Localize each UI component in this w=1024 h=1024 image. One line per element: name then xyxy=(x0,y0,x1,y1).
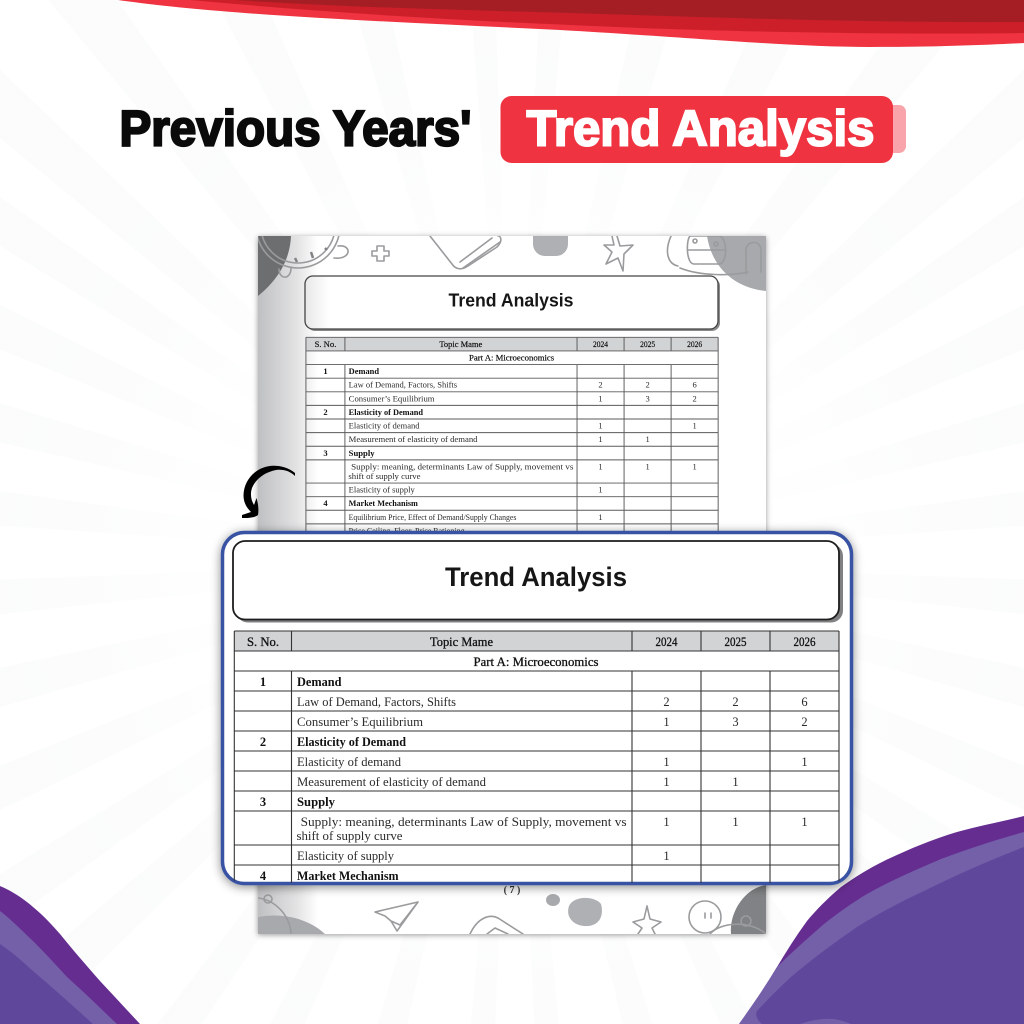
small trend analysis table: Demand xyxy=(349,366,379,376)
zoomed trend analysis table: 6 xyxy=(801,695,808,709)
zoomed heading card: Trend Analysis xyxy=(445,562,627,592)
small trend analysis table: 3 xyxy=(645,393,650,403)
zoomed heading card xyxy=(233,541,843,622)
zoomed trend analysis table: Supply: meaning, determinants Law of Supply, movement vs xyxy=(301,815,627,829)
zoomed trend analysis table: 1 xyxy=(801,755,808,769)
zoomed trend analysis table: 1 xyxy=(801,815,808,829)
small trend analysis table: 6 xyxy=(693,380,697,390)
title badge: Trend Analysis: Trend Analysis xyxy=(526,100,874,156)
zoomed trend analysis table: Consumer’s Equilibrium xyxy=(297,715,423,729)
zoomed trend analysis table: Elasticity of Demand xyxy=(297,735,406,749)
zoomed trend analysis table: 2 xyxy=(260,735,266,749)
zoomed trend analysis table: 2 xyxy=(801,715,808,729)
small heading card xyxy=(305,276,720,331)
small heading card: Trend Analysis xyxy=(448,290,574,310)
zoomed trend analysis table: 1 xyxy=(663,775,670,789)
small trend analysis table: 1 xyxy=(323,366,328,376)
small trend analysis table: Equilibrium Price, Effect of Demand/Supply Changes xyxy=(349,512,516,522)
small trend analysis table: 2 xyxy=(693,393,697,403)
small trend analysis table: 2 xyxy=(598,380,603,390)
small trend analysis table: 2 xyxy=(323,407,328,417)
small trend analysis table: Elasticity of supply xyxy=(349,485,416,495)
zoomed trend analysis table: 2025 xyxy=(724,635,746,649)
curved arrow pointing down to zoom panel xyxy=(242,466,295,518)
zoomed trend analysis table: 4 xyxy=(260,869,267,883)
small trend analysis table: Price Ceiling, Floor, Price Rationing xyxy=(349,525,465,535)
background book page xyxy=(256,184,766,934)
small trend analysis table: 2024 xyxy=(593,339,609,349)
bottom page doodles xyxy=(258,885,766,934)
small trend analysis table: Consumer’s Equilibrium xyxy=(349,393,435,403)
small trend analysis table xyxy=(306,337,718,538)
zoomed panel with blue frame xyxy=(222,532,852,885)
small trend analysis table: Market Mechanism xyxy=(349,498,418,508)
zoomed trend analysis table: 2 xyxy=(732,695,739,709)
title: Previous Years': Previous Years' xyxy=(120,100,472,156)
zoomed trend analysis table: Law of Demand, Factors, Shifts xyxy=(297,695,456,709)
small trend analysis table: Measurement of elasticity of demand xyxy=(349,434,478,444)
zoomed trend analysis table: 1 xyxy=(663,715,670,729)
zoomed trend analysis table: 1 xyxy=(663,755,670,769)
zoomed trend analysis table: Elasticity of demand xyxy=(297,755,402,769)
zoomed trend analysis table: 1 xyxy=(663,815,670,829)
top page doodles xyxy=(258,236,766,296)
zoomed trend analysis table: 2 xyxy=(663,695,670,709)
small trend analysis table: 1 xyxy=(598,461,603,471)
small trend analysis table: Supply xyxy=(349,448,375,458)
zoomed trend analysis table: Topic Mame xyxy=(430,635,493,649)
bottom-left purple wave xyxy=(0,886,140,1024)
small trend analysis table: 2 xyxy=(645,380,650,390)
zoomed trend analysis table: Measurement of elasticity of demand xyxy=(297,775,487,789)
small trend analysis table: 1 xyxy=(598,512,603,522)
small trend analysis table: S. No. xyxy=(315,339,336,349)
small trend analysis table: Elasticity of demand xyxy=(349,421,420,431)
small trend analysis table: Supply: meaning, determinants Law of Supply, movement vs xyxy=(351,461,573,471)
small trend analysis table: shift of supply curve xyxy=(348,471,421,481)
small trend analysis table: 1 xyxy=(693,461,697,471)
small trend analysis table: 1 xyxy=(598,393,603,403)
zoomed trend analysis table: Elasticity of supply xyxy=(297,849,395,863)
top red wave xyxy=(118,0,1024,47)
small trend analysis table: 3 xyxy=(323,448,328,458)
small trend analysis table: 1 xyxy=(598,485,603,495)
zoomed trend analysis table: Part A: Microeconomics xyxy=(474,655,599,669)
small trend analysis table: 1 xyxy=(645,434,650,444)
zoomed trend analysis table: 1 xyxy=(663,849,670,863)
zoomed trend analysis table: S. No. xyxy=(247,635,279,649)
zoomed trend analysis table: 2024 xyxy=(656,635,678,649)
small trend analysis table: 2026 xyxy=(687,339,702,349)
zoomed trend analysis table: Demand xyxy=(297,675,342,689)
bottom-right purple wave xyxy=(739,816,1024,1024)
zoomed trend analysis table: shift of supply curve xyxy=(296,829,403,843)
small trend analysis table: Elasticity of Demand xyxy=(349,407,423,417)
small trend analysis table: 1 xyxy=(645,461,650,471)
zoomed trend analysis table: 3 xyxy=(260,795,266,809)
page number: ( 7 ) xyxy=(504,885,520,896)
zoomed trend analysis table: 2026 xyxy=(794,635,816,649)
zoomed trend analysis table: 1 xyxy=(732,815,739,829)
zoomed trend analysis table: Market Mechanism xyxy=(297,869,399,883)
zoomed trend analysis table: Supply xyxy=(297,795,336,809)
small trend analysis table: 4 xyxy=(323,498,328,508)
small trend analysis table: Law of Demand, Factors, Shifts xyxy=(349,380,457,390)
zoomed trend analysis table xyxy=(234,631,839,885)
small trend analysis table: 2025 xyxy=(640,339,655,349)
small trend analysis table: 1 xyxy=(693,421,697,431)
small trend analysis table: 1 xyxy=(598,421,603,431)
zoomed trend analysis table: 1 xyxy=(260,675,266,689)
small trend analysis table: 1 xyxy=(598,434,603,444)
zoomed trend analysis table: 1 xyxy=(732,775,739,789)
zoomed trend analysis table: 3 xyxy=(732,715,739,729)
small trend analysis table: Part A: Microeconomics xyxy=(469,352,554,362)
small trend analysis table: Topic Mame xyxy=(439,339,482,349)
